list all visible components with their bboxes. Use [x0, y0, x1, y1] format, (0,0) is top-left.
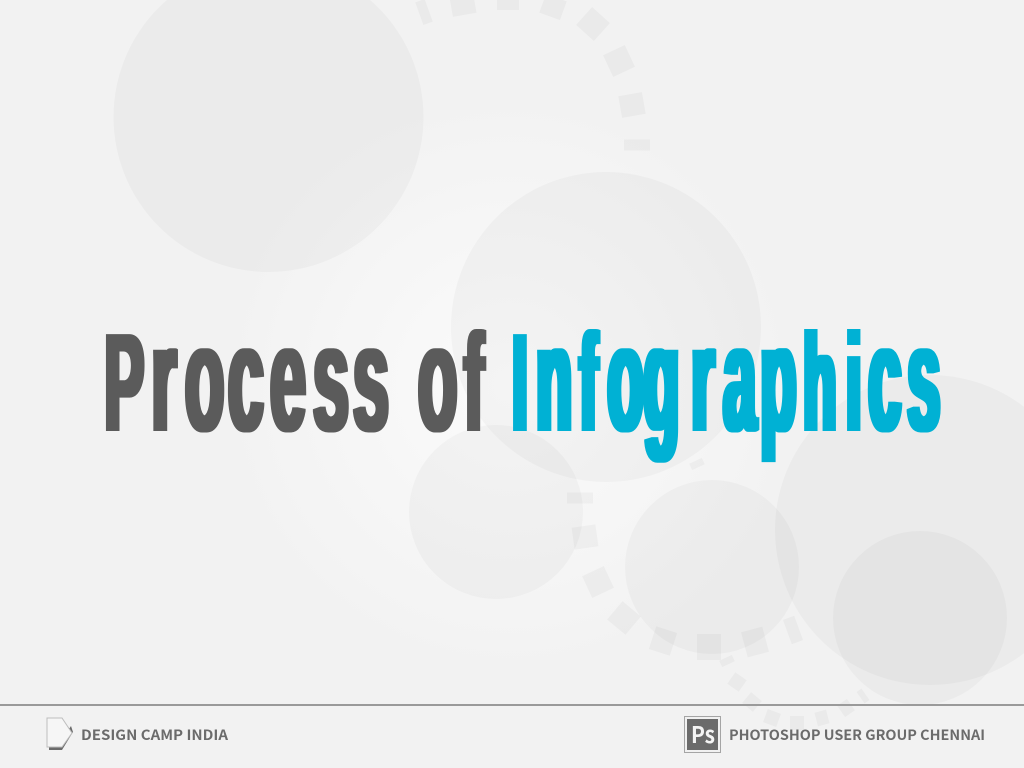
title: Process of: P: [104, 305, 144, 460]
title: Infographics: s: [908, 296, 940, 463]
title: Infographics: a: [723, 296, 757, 463]
title: Infographics: p: [761, 296, 796, 463]
middle gear ring: [567, 458, 803, 660]
title: Infographics: I: [512, 306, 527, 460]
title: Infographics: g: [644, 296, 679, 463]
title: Infographics: f: [580, 306, 598, 460]
title: Process of: o: [185, 295, 224, 462]
icon: photoshop logo: Ps: [691, 716, 715, 750]
title: Process of: f: [464, 305, 484, 460]
title: Infographics: [512, 296, 940, 463]
footer label: photoshop user group chennai: PHOTOSHOP USER GROUP CHENNAI: [729, 725, 985, 745]
title: Process of: e: [270, 295, 306, 462]
title: Process of: s: [353, 295, 407, 462]
title: Infographics: n: [536, 296, 572, 463]
top gear ring: [415, 0, 650, 150]
title: Infographics: c: [869, 296, 901, 463]
title: Process of: s: [313, 295, 349, 462]
title: Infographics: i: [846, 306, 861, 460]
icon: photoshop logo: [684, 716, 720, 752]
title: Infographics: r: [691, 296, 714, 463]
title: Infographics: o: [608, 296, 643, 463]
icon: design camp logo: [47, 718, 73, 750]
title: Process of: [104, 295, 484, 462]
footer divider: [0, 704, 1024, 706]
title: Process of: r: [151, 295, 176, 462]
title: Process of: o: [418, 295, 457, 462]
footer label: design camp india: DESIGN CAMP INDIA: [81, 725, 229, 745]
bottom gear ring: [719, 655, 869, 730]
title: Infographics: h: [803, 306, 836, 460]
title: Process of: c: [228, 295, 264, 462]
